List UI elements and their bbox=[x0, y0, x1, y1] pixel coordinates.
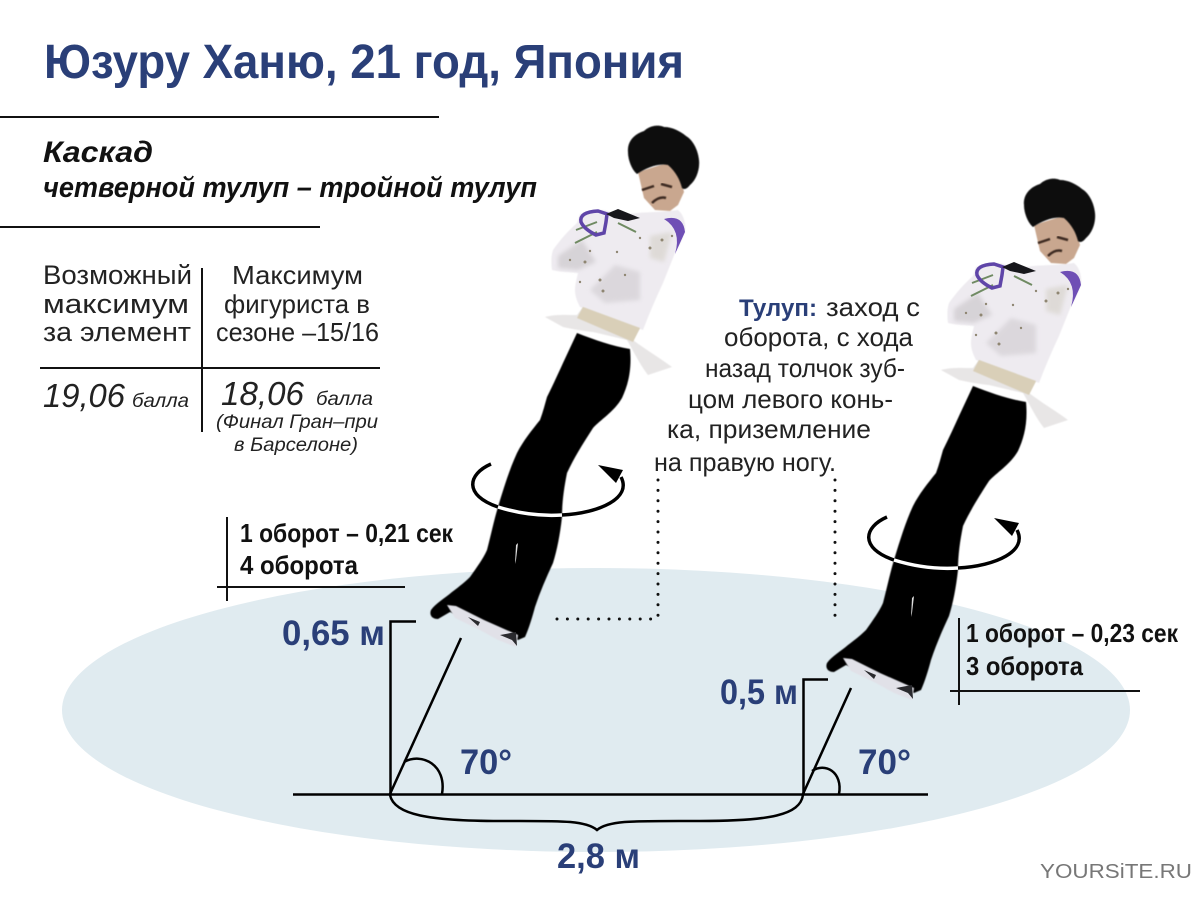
column: skater maximum: фигуриста в bbox=[224, 289, 370, 319]
distance label: 2,8 м bbox=[557, 837, 640, 876]
score: 19,06: балла bbox=[132, 391, 189, 412]
rotation label 1: 4 оборота bbox=[240, 550, 358, 580]
score: 18,06: в Барселоне) bbox=[234, 435, 358, 456]
score: 19,06 bbox=[43, 377, 189, 414]
column: possible maximum bbox=[43, 260, 192, 347]
dotted guide lines bbox=[557, 480, 835, 619]
toe loop description: назад толчок зуб- bbox=[705, 353, 905, 383]
rotation label 1: 1 оборот – 0,21 сек bbox=[240, 518, 454, 548]
toe loop description bbox=[654, 292, 920, 477]
toe loop description: оборота, с хода bbox=[724, 322, 914, 352]
angle label 2: 70° bbox=[858, 743, 911, 782]
column: skater maximum: сезоне –15/16 bbox=[216, 317, 379, 347]
element heading: Каскад bbox=[43, 136, 153, 169]
ice ellipse bbox=[62, 568, 1130, 852]
toe loop description: ка, приземление bbox=[667, 414, 871, 444]
column: skater maximum: Максимум bbox=[232, 260, 363, 290]
score table bbox=[40, 260, 380, 456]
skater 2 bbox=[826, 179, 1095, 700]
height label 0,65 м: 0,65 м bbox=[282, 614, 385, 653]
angle label 1: 70° bbox=[460, 743, 512, 782]
toe loop description: цом левого конь- bbox=[688, 384, 893, 414]
score: 18,06: балла bbox=[316, 389, 373, 410]
toe loop description: заход с bbox=[826, 292, 920, 322]
skater 1 bbox=[430, 126, 699, 647]
title: Юзуру Ханю, 21 год, Япония bbox=[44, 36, 684, 89]
rotation label 2 bbox=[950, 618, 1179, 705]
toe loop description: на правую ногу. bbox=[654, 447, 836, 477]
height label 0,5 м: 0,5 м bbox=[720, 673, 798, 712]
column: possible maximum: Возможный bbox=[43, 260, 192, 290]
column: possible maximum: за элемент bbox=[43, 317, 191, 347]
score: 18,06: 18,06 bbox=[221, 375, 305, 412]
rotation label 2: 3 оборота bbox=[966, 651, 1083, 681]
watermark: YOURSiTE.RU bbox=[1040, 861, 1192, 883]
rotation label 1 bbox=[217, 517, 454, 601]
score: 18,06: (Финал Гран–при bbox=[216, 412, 378, 433]
column: skater maximum bbox=[216, 260, 379, 347]
jump geometry diagram bbox=[293, 622, 928, 830]
score: 18,06 bbox=[216, 375, 378, 456]
score: 19,06: 19,06 bbox=[43, 377, 126, 414]
toe loop description: Тулуп: bbox=[739, 295, 817, 322]
column: possible maximum: максимум bbox=[43, 289, 189, 319]
element heading bbox=[43, 136, 537, 204]
element heading: четверной тулуп – тройной тулуп bbox=[43, 172, 537, 204]
